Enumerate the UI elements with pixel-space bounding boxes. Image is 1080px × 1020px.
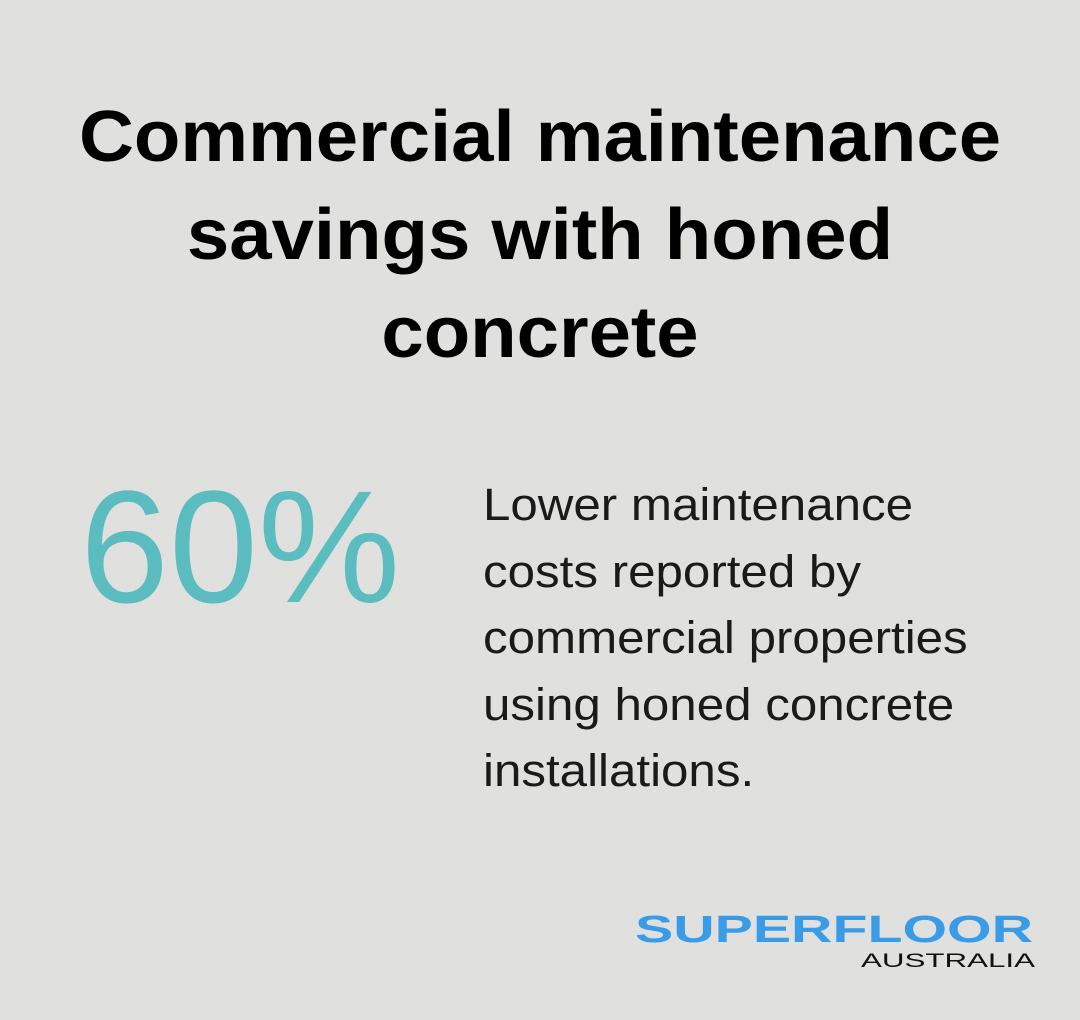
title: Commercial maintenance [79, 97, 1001, 177]
title: concrete [381, 293, 699, 373]
logo: Superfloor Australia [635, 909, 1036, 972]
statistic: 60%: 60% [80, 457, 400, 636]
title [79, 97, 1001, 373]
description text: commercial properties [483, 612, 968, 663]
description text [483, 479, 968, 796]
logo: Superfloor Australia: AUSTRALIA [861, 951, 1036, 972]
description text: installations. [483, 745, 754, 796]
logo: Superfloor Australia: SUPERFLOOR [635, 909, 1033, 951]
description text: costs reported by [483, 546, 861, 596]
title: savings with honed [187, 195, 893, 275]
description text: using honed concrete [483, 678, 954, 730]
description text: Lower maintenance [483, 479, 913, 530]
